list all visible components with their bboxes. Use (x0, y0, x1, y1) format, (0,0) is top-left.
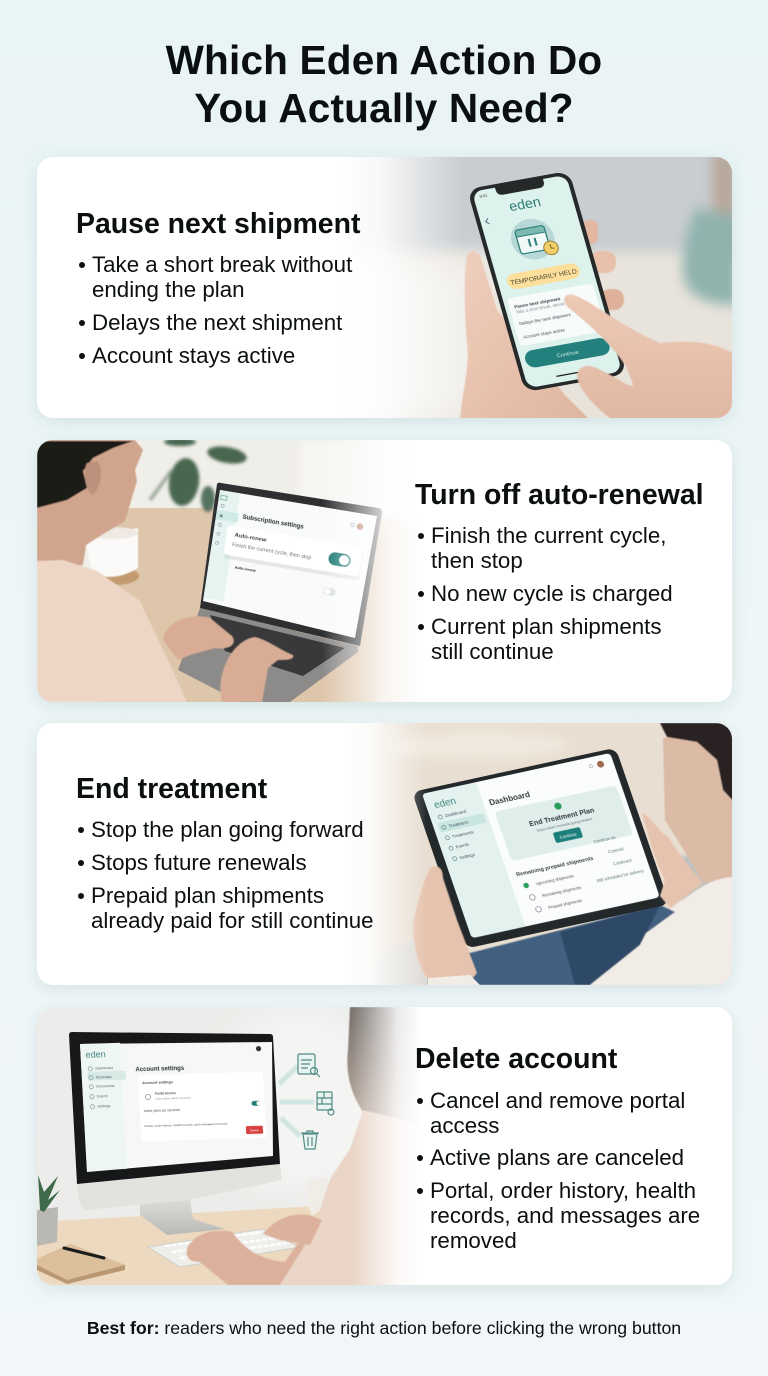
notebook and pen (37, 1244, 125, 1284)
person (428, 723, 734, 985)
white fade into text (342, 723, 427, 985)
tablet: Dashboard (444, 809, 467, 818)
remaining prepaid shipments list: Remaining prepaid shipments (515, 856, 594, 878)
coffee mug (306, 1178, 328, 1216)
right hand pointing (564, 294, 734, 420)
bullet: already paid for still continue (91, 908, 374, 933)
bullet list (79, 252, 352, 368)
bullet: removed (430, 1228, 517, 1253)
coffee cup (85, 527, 139, 585)
remaining prepaid shipments list: Prepaid shipments (548, 898, 583, 910)
bullet: then stop (431, 548, 523, 573)
remaining prepaid shipments list: Remaining shipments (541, 885, 582, 898)
icon: trash can (301, 1131, 319, 1149)
bullet: Delays the next shipment (92, 310, 342, 335)
remaining prepaid shipments list: Continued (612, 857, 633, 866)
laptop screen: Subscription settings (242, 514, 305, 531)
end treatment plan box: End Treatment Plan (528, 807, 596, 828)
monitor screen: Events (97, 1094, 108, 1099)
settings panel (138, 1072, 266, 1141)
glowing connector beams (279, 1066, 314, 1136)
laptop (178, 483, 382, 702)
heading: Pause next shipment (76, 208, 360, 240)
bullet (431, 523, 666, 573)
desk plant (37, 1175, 60, 1246)
photo: hand holding phone (381, 157, 732, 418)
bullet: Stops future renewals (91, 850, 307, 875)
bullet: Account stays active (92, 343, 295, 368)
eden logo: eden (507, 193, 543, 214)
bullet: Current plan shipments (431, 614, 662, 639)
panel: turn off auto-renewal (37, 440, 732, 702)
bullet: access (430, 1113, 499, 1138)
continue button (523, 337, 612, 369)
person (187, 1007, 422, 1285)
end treatment plan box: Continue (559, 831, 578, 840)
laptop screen (203, 490, 369, 623)
bullet list (78, 817, 374, 933)
monitor screen: Account settings (135, 1066, 185, 1073)
tablet (412, 748, 670, 949)
left hand behind phone (460, 220, 624, 420)
bullet: Finish the current cycle, (431, 523, 666, 548)
white fade into text (337, 157, 462, 418)
option list: Pause next shipment (514, 296, 561, 309)
settings panel: Delete (250, 1128, 259, 1133)
monitor screen (80, 1039, 268, 1170)
bullet list (418, 523, 673, 664)
blurred room background (342, 723, 735, 985)
monitor screen: Settings (97, 1104, 111, 1109)
option list: Delays the next shipment (518, 312, 572, 326)
end treatment plan box (495, 785, 633, 861)
status pill (505, 262, 582, 290)
bullet (430, 1088, 685, 1138)
panel: pause next shipment (37, 157, 732, 418)
bullet: Stop the plan going forward (91, 817, 364, 842)
monitor (69, 1032, 282, 1235)
photo: person at desktop computer (37, 1007, 412, 1285)
remaining prepaid shipments list: Still scheduled for delivery (596, 868, 645, 883)
bullet: Portal, order history, health (430, 1178, 696, 1203)
settings panel: Active plans are canceled (144, 1108, 180, 1113)
photo: person holding tablet (374, 723, 732, 985)
option list: Account stays active (522, 327, 566, 340)
tablet: Treatment (448, 820, 469, 829)
bullet (92, 252, 352, 302)
hands on keyboard (163, 616, 293, 702)
option list: Take a short break, attend (515, 301, 566, 315)
option list (507, 283, 606, 346)
bullet: ending the plan (92, 277, 244, 302)
bullet: Take a short break without (92, 252, 352, 277)
monitor screen: Documents (96, 1084, 115, 1089)
bullet list (417, 1088, 700, 1253)
footer note: Best for: readers who need the right action before clicking the wrong button (87, 1318, 681, 1338)
heading: Turn off auto-renewal (415, 479, 704, 511)
bullet: Active plans are canceled (430, 1145, 684, 1170)
white fade into text (352, 1007, 422, 1285)
bullet (430, 1178, 700, 1253)
status pill: TEMPORARILY HELD (510, 268, 578, 287)
icon: database records (317, 1092, 334, 1115)
title: You Actually Need? (194, 85, 574, 131)
settings panel: Portal Access (155, 1091, 176, 1096)
bullet: No new cycle is charged (431, 581, 673, 606)
wall and desk background (37, 1007, 422, 1285)
keyboard (148, 1229, 300, 1267)
heading: End treatment (76, 773, 267, 805)
bullet: records, and messages are (430, 1203, 700, 1228)
bullet (431, 614, 662, 664)
settings panel: Active plans will be canceled (155, 1096, 191, 1101)
settings panel: Portal, order history, health records, and messages removed (145, 1122, 228, 1128)
title: Which Eden Action Do (166, 37, 602, 83)
plant (150, 438, 248, 512)
blurred room background (337, 140, 757, 418)
remaining prepaid shipments list: Upcoming shipments (535, 873, 575, 886)
calendar pause icon (506, 215, 560, 263)
tablet: Events (455, 842, 470, 850)
phone with pause screen (467, 171, 627, 392)
icon: document search (298, 1054, 320, 1077)
room and desk background (37, 440, 430, 708)
laptop screen: Auto-renew (235, 565, 256, 573)
heading: Delete account (415, 1043, 617, 1075)
panel: delete account (37, 1007, 732, 1285)
monitor screen: Renewals (96, 1075, 112, 1080)
remaining prepaid shipments list: Continue as (593, 835, 616, 844)
auto-renew settings card: Finish the current cycle, then stop (232, 542, 312, 561)
monitor screen: Dashboard (95, 1066, 113, 1071)
tablet: Dashboard (488, 790, 531, 807)
phone with pause screen: 9:41 (479, 192, 489, 199)
auto-renew settings card: Auto-renew (234, 533, 267, 544)
woman (37, 440, 293, 702)
photo: woman using laptop (37, 440, 400, 702)
hands holding tablet (413, 813, 702, 985)
tablet: Treatments (452, 830, 475, 839)
settings panel: Account settings (142, 1080, 173, 1085)
tablet: Settings (459, 852, 476, 860)
title (166, 37, 602, 131)
bullet: Prepaid plan shipments (91, 883, 324, 908)
continue button: Continue (556, 350, 580, 359)
white fade into text (322, 440, 422, 702)
auto-renew settings card (223, 525, 364, 581)
bullet: Cancel and remove portal (430, 1088, 685, 1113)
monitor screen: eden (85, 1049, 106, 1060)
panel: end treatment (37, 723, 732, 985)
tablet: eden (433, 796, 458, 811)
bullet: still continue (431, 639, 554, 664)
remaining prepaid shipments list (510, 831, 650, 914)
remaining prepaid shipments list: Covered (607, 846, 625, 854)
end treatment plan box: Stops future renewals going forward (536, 817, 593, 833)
bullet (91, 883, 374, 933)
